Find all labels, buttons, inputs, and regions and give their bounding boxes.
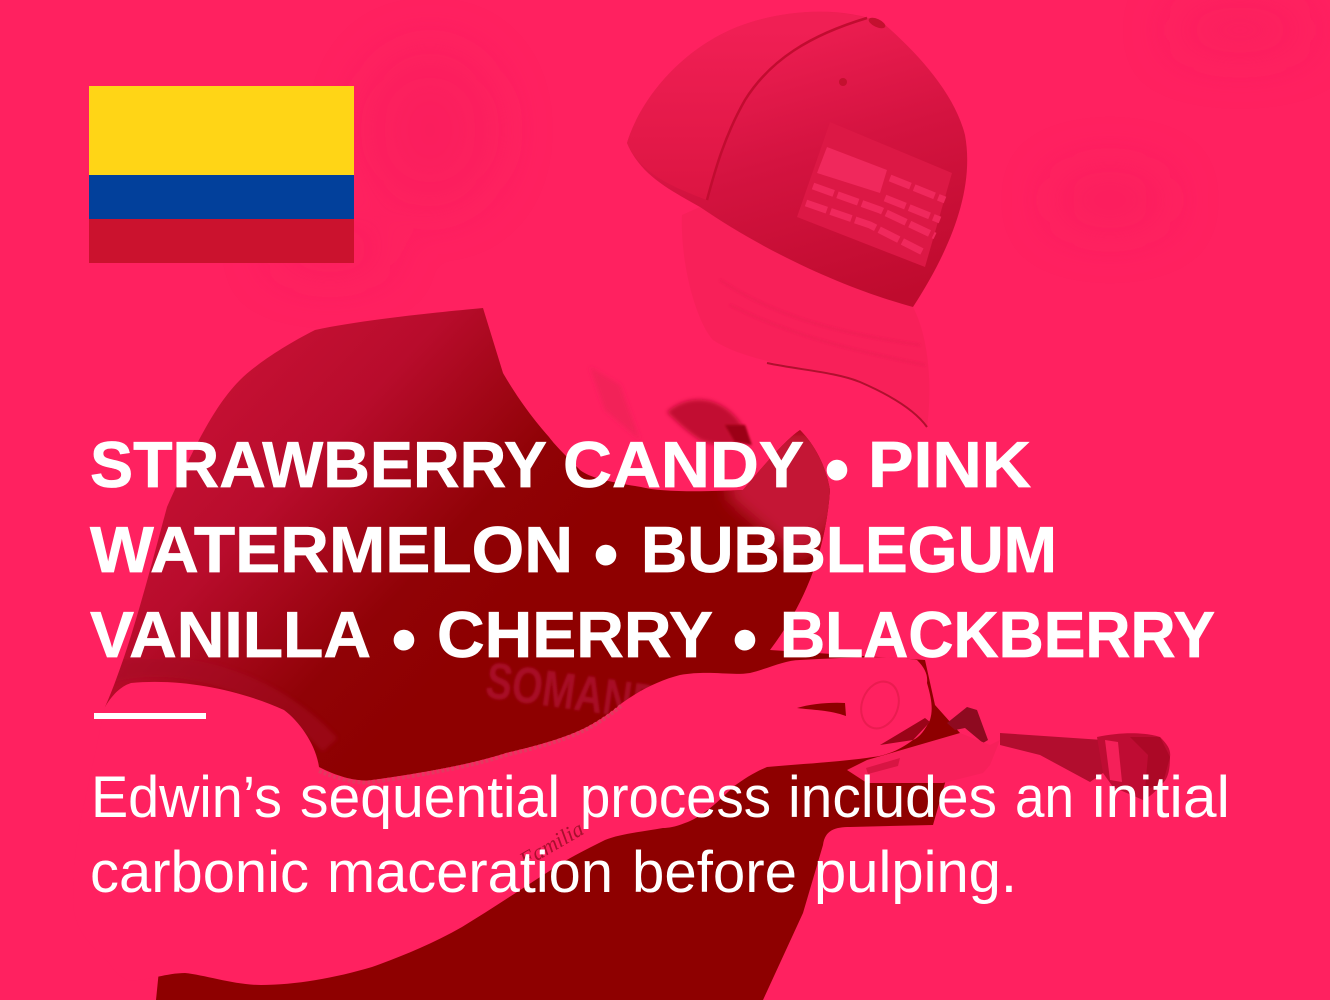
body text: process bbox=[580, 765, 771, 830]
headline: flavor notes bbox=[90, 428, 1215, 680]
headline: flavor notes: • bbox=[824, 430, 850, 510]
body text: initial bbox=[1092, 765, 1230, 830]
tattoo: Familia bbox=[514, 816, 588, 873]
shirt bbox=[90, 300, 1010, 1000]
body text: sequential bbox=[300, 765, 560, 830]
body text: Edwin’s bbox=[91, 765, 282, 830]
refractometer bbox=[847, 707, 1170, 800]
headline: flavor notes: BLACKBERRY bbox=[780, 598, 1215, 671]
headline: flavor notes: CHERRY bbox=[437, 598, 713, 671]
neck and beard bbox=[590, 367, 752, 445]
flag red band bbox=[89, 219, 354, 263]
body text bbox=[90, 765, 1230, 905]
flag yellow band bbox=[89, 86, 354, 175]
headline: flavor notes: • bbox=[391, 600, 417, 680]
body text: pulping. bbox=[814, 840, 1017, 905]
headline: flavor notes: VANILLA bbox=[90, 598, 371, 671]
headline: flavor notes: • bbox=[732, 600, 758, 680]
headline: flavor notes: WATERMELON bbox=[90, 513, 573, 586]
headline: flavor notes: STRAWBERRY bbox=[90, 428, 547, 501]
cap brim bbox=[682, 207, 929, 427]
body text: includes bbox=[788, 765, 997, 830]
body text: before bbox=[632, 840, 797, 905]
short divider rule bbox=[94, 713, 206, 719]
background blotches bbox=[270, 5, 1310, 275]
body text: an bbox=[1015, 765, 1074, 830]
body text: carbonic bbox=[90, 840, 309, 905]
flag blue band bbox=[89, 175, 354, 219]
cap buttons bbox=[867, 16, 887, 30]
Colombian flag bbox=[89, 86, 354, 263]
headline: flavor notes: • bbox=[593, 515, 619, 595]
body text: maceration bbox=[327, 840, 613, 905]
headline: flavor notes: PINK bbox=[868, 428, 1031, 501]
left arm and hand bbox=[73, 657, 932, 985]
cap flag patch bbox=[797, 122, 952, 267]
background photo: man with cap using a refractometer, pink duotone bbox=[105, 12, 1170, 1000]
cap crown bbox=[627, 12, 967, 307]
baseball cap bbox=[627, 12, 967, 427]
headline: flavor notes: CANDY bbox=[563, 428, 804, 501]
shirt lettering: SOMAND bbox=[482, 651, 664, 733]
headline: flavor notes: BUBBLEGUM bbox=[641, 513, 1057, 586]
